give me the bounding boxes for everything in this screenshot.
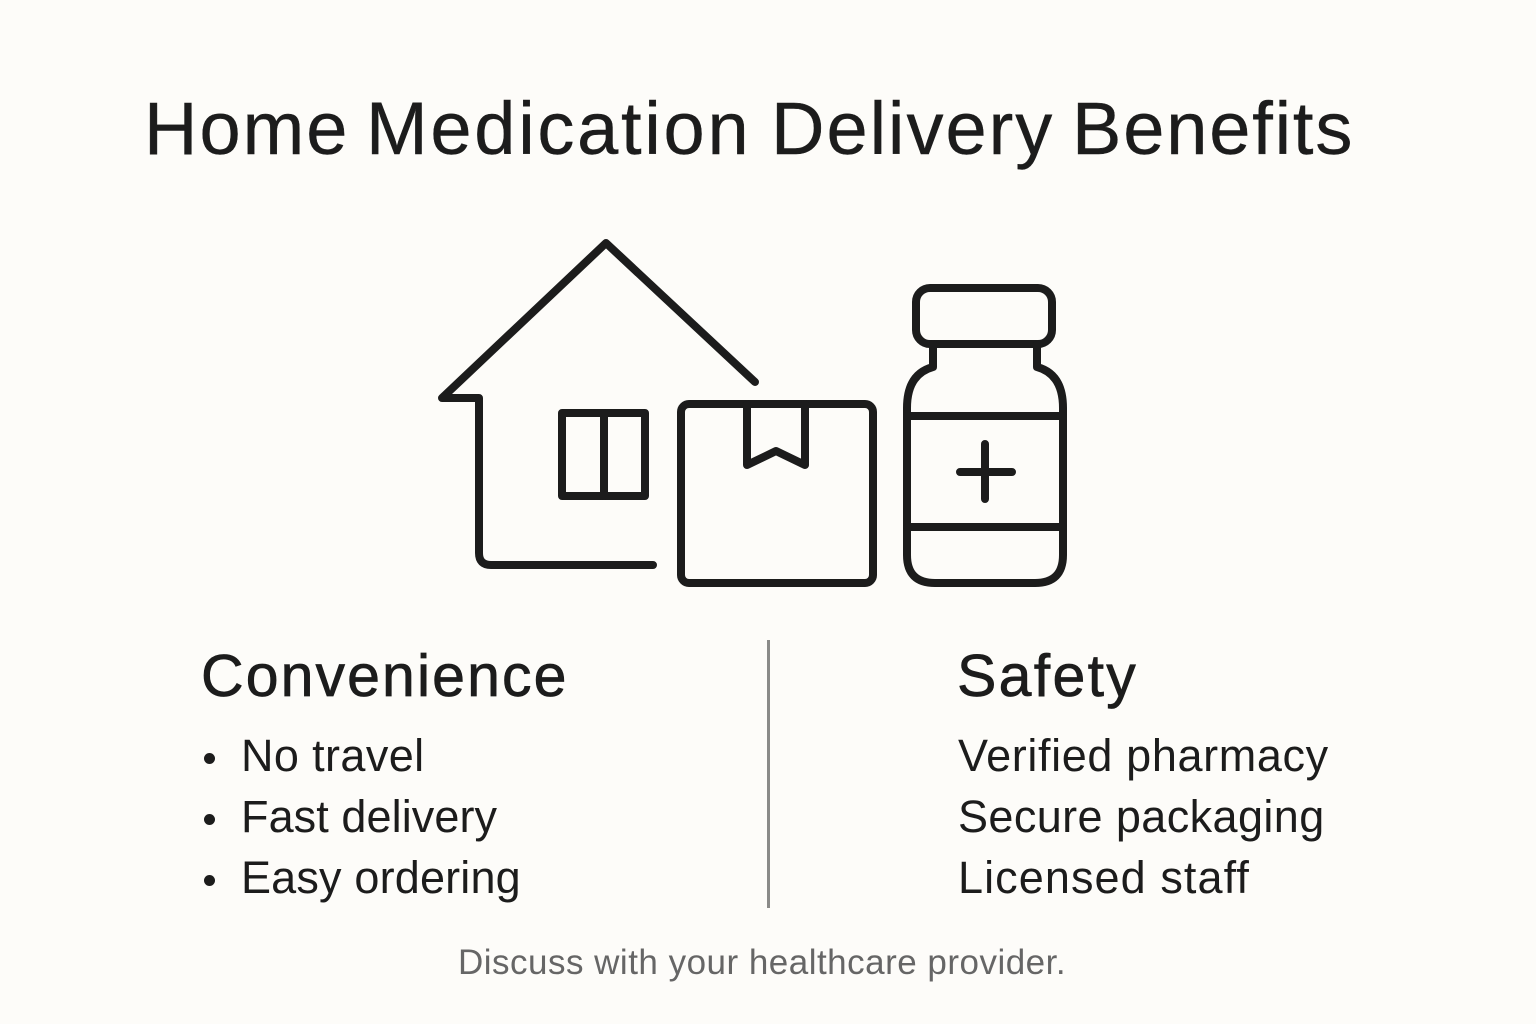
- list: convenience items: Fast delivery: [241, 791, 497, 842]
- title: [144, 87, 1354, 170]
- list: safety items: Secure packaging: [958, 791, 1325, 842]
- vertical divider: [767, 640, 770, 908]
- title: Medication: [366, 87, 751, 170]
- heading: safety: Safety: [957, 643, 1138, 709]
- list: convenience items: No travel: [241, 730, 424, 781]
- panel: safety: [957, 643, 1329, 903]
- panel: convenience: [201, 643, 569, 903]
- list: convenience items: [204, 730, 521, 903]
- icon: house: [442, 243, 755, 565]
- list: safety items: Licensed staff: [958, 852, 1250, 903]
- footer note: Discuss with your healthcare provider.: [458, 943, 1066, 982]
- title: Home: [144, 87, 349, 170]
- icon: package: [681, 404, 873, 583]
- list: convenience items: Easy ordering: [241, 852, 521, 903]
- list: safety items: [958, 730, 1329, 903]
- title: Delivery: [771, 87, 1054, 170]
- heading: convenience: Convenience: [201, 643, 569, 709]
- title: Benefits: [1072, 87, 1354, 170]
- icon: medicine bottle: [907, 288, 1063, 583]
- list: safety items: Verified pharmacy: [958, 730, 1329, 781]
